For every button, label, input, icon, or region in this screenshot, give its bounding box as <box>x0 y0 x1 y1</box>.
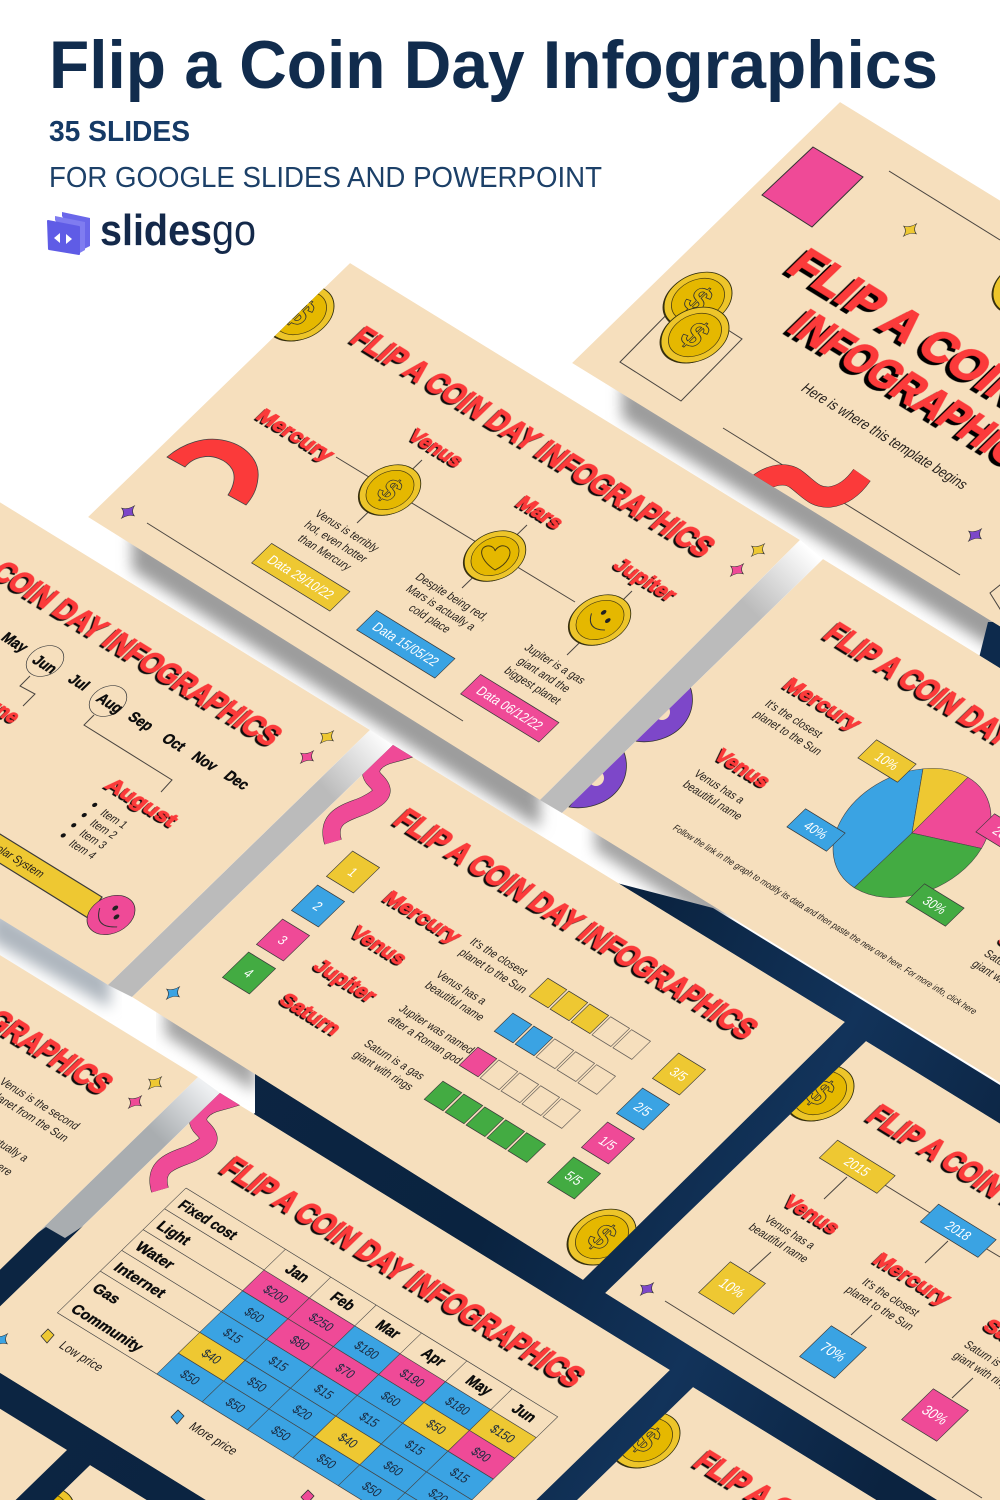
pink wave <box>158 1093 247 1190</box>
price table: Jun <box>507 1401 540 1426</box>
rating row: blue 2 of 5 <box>494 1013 615 1094</box>
month labels: Oct <box>157 731 189 755</box>
score 2/5: 2/5 <box>630 1099 656 1119</box>
red arc <box>167 439 258 505</box>
price table: Water <box>131 1239 179 1273</box>
price table: $90 <box>468 1445 495 1465</box>
price table: $40 <box>198 1347 225 1367</box>
date box: pink <box>461 674 559 742</box>
icon: smile coin <box>568 594 632 646</box>
price table: $60 <box>380 1458 407 1479</box>
legend: low price: Low price <box>56 1339 107 1374</box>
heading: Mercury: Mercury <box>868 1249 957 1310</box>
body text <box>0 1076 82 1178</box>
icon: back coin: $ <box>674 279 723 321</box>
score 5/5: 5/5 <box>561 1168 587 1188</box>
heading: Venus: Venus <box>345 922 412 970</box>
date box: yellow <box>252 543 350 611</box>
price table: $40 <box>334 1430 361 1451</box>
subtitle: slide count: 35 SLIDES <box>49 116 190 148</box>
panel: months slide <box>0 453 370 985</box>
icon: front coin <box>660 306 730 364</box>
heading: Mercury: Mercury <box>778 674 867 735</box>
price table: Internet <box>109 1260 170 1301</box>
icon: corner coin: $ <box>796 1072 845 1114</box>
text: Venus description: than Mercury <box>295 533 354 573</box>
icon: purple sparkle <box>120 505 136 519</box>
price table: $150 <box>486 1422 519 1446</box>
price table: $15 <box>219 1326 246 1346</box>
month circles <box>26 645 128 717</box>
price table: $50 <box>358 1479 385 1500</box>
slide title: FLIP A COIN DAY INFOGRAPHICS <box>213 1151 592 1394</box>
price table: Light <box>152 1218 194 1249</box>
icon: slidesgo logo <box>48 212 90 254</box>
value box 10%: 10% <box>714 1276 749 1301</box>
date box: yellow: Data 29/10/22 <box>264 552 338 602</box>
price table: $50 <box>222 1395 249 1416</box>
icon: dollar coin: $ <box>578 1216 627 1258</box>
price table: $50 <box>177 1367 203 1388</box>
month labels: Dec <box>220 768 253 793</box>
text: Venus: Venus has a <box>433 969 490 1008</box>
panel: price table slide <box>0 1093 670 1500</box>
text: Mercury description: planet to the Sun <box>750 709 824 758</box>
pie label 40% <box>787 809 845 851</box>
icon: pink sparkle <box>294 747 320 767</box>
heading: Venus: Venus <box>778 1191 845 1239</box>
legend: more price <box>171 1410 241 1458</box>
month connectors <box>20 676 172 792</box>
price table: $250 <box>305 1311 337 1334</box>
score 1/5 <box>581 1122 635 1164</box>
subtitle: platforms: FOR GOOGLE SLIDES AND POWERPOINT <box>49 162 602 194</box>
item list: Item 3 <box>76 828 109 852</box>
panel: right timeline slide <box>605 1041 1000 1500</box>
price table: Fixed cost <box>174 1198 241 1243</box>
panel: rating slide <box>132 745 845 1280</box>
rating row: pink 1 of 5 <box>459 1047 580 1128</box>
red wave <box>750 475 862 497</box>
value box 70%: 70% <box>815 1340 850 1365</box>
heading: Mercury: Mercury <box>251 405 340 466</box>
price table: Feb <box>326 1290 358 1314</box>
panel: cover slide <box>572 102 1000 640</box>
month labels <box>0 630 253 793</box>
price table: Mar <box>371 1318 404 1342</box>
icon: front coin: $ <box>671 314 720 356</box>
icon: pink smiley <box>77 888 145 942</box>
legend: pink marker <box>301 1490 314 1500</box>
heading: Mars: Mars <box>511 492 569 534</box>
legend: more price: More price <box>186 1420 241 1458</box>
logo wordmark: slidesgo <box>100 206 256 255</box>
panel: pie chart slide <box>562 559 1000 1090</box>
text: Jupiter: after a Roman god <box>384 1014 465 1067</box>
heading: Venus: Venus <box>709 745 776 792</box>
small outline box <box>989 584 1000 610</box>
icon: corner coin: $ <box>276 292 325 334</box>
item list: Item 2 <box>86 818 120 841</box>
rating row: yellow 3 of 5 <box>529 978 650 1059</box>
number square 2: 2 <box>309 899 326 914</box>
month labels: Sep <box>124 709 157 734</box>
text: Mars description: cold place <box>405 603 453 636</box>
icon: yellow sparkle <box>142 1073 168 1093</box>
pie label 40%: 40% <box>800 818 832 842</box>
year box 2015: 2015 <box>840 1154 874 1179</box>
pie label 10%: 10% <box>871 749 903 773</box>
icon: yellow sparkle <box>314 727 340 747</box>
background shadows between slides <box>0 380 1000 1347</box>
price table: $50 <box>243 1375 270 1395</box>
text: Jupiter: Jupiter was named <box>396 1003 477 1056</box>
text: Jupiter description: Jupiter is a gas <box>521 642 588 687</box>
rating row: green 5 of 5 <box>424 1081 545 1162</box>
cover subtitle: Here is where this template begins <box>797 381 971 493</box>
price table: $180 <box>351 1339 383 1362</box>
text: Venus description: hot, even hotter <box>301 519 370 565</box>
timeline connectors <box>665 1177 1000 1498</box>
dark navy background <box>0 622 1000 1500</box>
text: Mercury: It's the closest <box>467 936 531 979</box>
text: Saturn: giant with rings <box>349 1049 416 1093</box>
month labels: Jul <box>64 672 93 694</box>
heading: Mercury: Mercury <box>378 887 467 948</box>
panel: far left slide K <box>0 1173 67 1500</box>
icon: pink sparkle <box>730 563 744 577</box>
heading: Venus: Venus <box>403 425 469 472</box>
icon: heart coin <box>462 530 526 582</box>
price table: $15 <box>356 1410 383 1430</box>
panel: timeline slide <box>88 263 800 800</box>
price table: $180 <box>441 1394 474 1418</box>
icon: blue sparkle <box>160 983 186 1003</box>
price table: $70 <box>332 1361 359 1381</box>
number square 3: 3 <box>274 933 291 948</box>
price table: Community <box>67 1302 147 1355</box>
text: Jupiter description: biggest planet <box>501 665 564 707</box>
month labels: Jun <box>28 653 60 677</box>
text: Venus description: Venus has a <box>691 768 748 807</box>
month labels: Nov <box>187 749 222 775</box>
month labels: Aug <box>92 691 126 717</box>
number square 1: 1 <box>344 865 361 880</box>
purple half discs <box>569 682 692 808</box>
text: Venus description: Venus is terribly <box>312 508 382 555</box>
value box 70% <box>800 1326 866 1378</box>
pink square <box>762 147 863 227</box>
year box 2018 <box>920 1204 996 1257</box>
icon: corner coin <box>274 288 334 342</box>
year box 2018: 2018 <box>941 1218 975 1243</box>
price table: $20 <box>289 1403 316 1423</box>
number square 1 <box>326 851 380 893</box>
text: Mercury: planet to the Sun <box>842 1284 916 1333</box>
date box: blue <box>357 610 455 678</box>
value box 30%: 30% <box>917 1403 952 1428</box>
icon: pink sparkle <box>122 1092 148 1112</box>
price table: $60 <box>377 1389 404 1409</box>
score 1/5: 1/5 <box>595 1133 621 1153</box>
panel: slide H, partial left slide <box>0 800 198 1332</box>
pie chart <box>800 744 1000 922</box>
timeline connectors <box>336 457 632 655</box>
heading: Saturn: Saturn <box>274 989 346 1040</box>
text: Mercury description: It's the closest <box>762 698 826 741</box>
text: Venus: Venus has a <box>761 1214 818 1252</box>
icon: dollar coin <box>552 1198 650 1276</box>
item list: Item 4 <box>66 838 99 862</box>
icon: corner coin: $ <box>622 1419 671 1461</box>
year box 2015 <box>819 1140 895 1193</box>
heading: August: August <box>100 774 184 832</box>
icon: corner coin <box>0 1476 88 1500</box>
number square 4: 4 <box>240 966 257 981</box>
coin frame <box>619 316 743 402</box>
yellow progress bar <box>0 797 102 918</box>
icon: dollar coin: $ <box>369 471 412 508</box>
footnote: Follow the link in the graph to modify its data and then paste the new one here. For more info, click here <box>670 823 980 1016</box>
text: Venus description: beautiful name <box>679 779 745 823</box>
panel: bottom right slide <box>431 1387 1000 1500</box>
score 2/5 <box>616 1088 670 1130</box>
pie label 30%: 30% <box>919 893 951 917</box>
panel: bottom left slide <box>0 1465 540 1500</box>
text: Mars description: Mars is actually a <box>403 583 479 634</box>
price table: May <box>461 1373 496 1399</box>
price table: $15 <box>310 1382 337 1402</box>
number square 3 <box>256 919 310 961</box>
icon: corner coin <box>596 1401 694 1479</box>
text: Jupiter description: giant and the <box>514 655 573 695</box>
text: Mercury: planet to the Sun <box>455 947 529 996</box>
price table: $15 <box>446 1465 473 1486</box>
date box: blue: Data 15/05/22 <box>369 619 443 669</box>
icon: dollar coin <box>358 464 422 516</box>
heading: Jupiter: Jupiter <box>308 955 382 1007</box>
text: Venus: beautiful name <box>745 1222 811 1265</box>
pie label 30% <box>906 884 964 926</box>
icon: purple sparkle <box>634 1279 660 1299</box>
score 3/5: 3/5 <box>666 1064 692 1084</box>
price table: $80 <box>286 1333 313 1353</box>
value box 30% <box>902 1389 968 1441</box>
price table: Jan <box>281 1262 313 1286</box>
heading: Jupiter: Jupiter <box>608 554 682 606</box>
price table: Gas <box>88 1281 124 1307</box>
icon: yellow sparkle <box>902 223 918 237</box>
icon: corner coin <box>770 1054 868 1132</box>
score 3/5 <box>652 1053 706 1095</box>
text: Mercury: It's the closest <box>859 1277 923 1319</box>
pie label 20% <box>976 814 1000 856</box>
value box 10% <box>699 1262 765 1314</box>
icon: back coin <box>662 272 732 322</box>
pink wave <box>331 745 420 842</box>
price table: $190 <box>396 1366 428 1390</box>
price table: $50 <box>423 1417 450 1437</box>
icon: yellow sparkle <box>750 543 766 557</box>
icon: purple sparkle <box>968 528 982 542</box>
number square 4 <box>222 952 276 994</box>
price table <box>57 1188 558 1500</box>
text: Saturn: Saturn is a gas <box>361 1038 427 1083</box>
text: Mars description: Despite being red, <box>412 572 491 623</box>
legend: low price <box>41 1329 107 1374</box>
slide title: FLIP A COIN DAY INFOGRAPHICS <box>343 321 722 564</box>
price table: $15 <box>401 1438 428 1458</box>
header title: Flip a Coin Day Infographics <box>49 27 938 103</box>
price table: $200 <box>260 1283 292 1306</box>
pie label 10% <box>858 740 916 782</box>
price table: Apr <box>417 1346 449 1370</box>
number square 2 <box>291 885 345 927</box>
price table: $50 <box>267 1423 294 1444</box>
item list: Item 1 <box>97 808 130 831</box>
item list <box>55 801 130 862</box>
price table: $60 <box>241 1305 268 1325</box>
date box: pink: Data 06/12/22 <box>473 683 547 733</box>
text: Venus: beautiful name <box>421 980 487 1024</box>
score 5/5 <box>547 1157 601 1199</box>
slide title: FLIP A COIN DAY INFOGRAPHICS <box>386 803 765 1046</box>
price table: $15 <box>265 1354 292 1374</box>
icon: edge coin <box>992 275 1000 311</box>
price table: $50 <box>313 1451 340 1472</box>
icon: blue sparkle <box>0 1330 14 1350</box>
